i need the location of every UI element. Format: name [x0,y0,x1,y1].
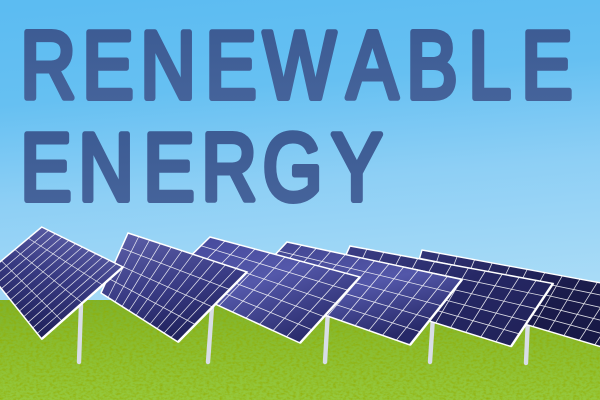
grass field [0,300,600,400]
solar panel 3 [165,237,360,343]
title: RENEWABLE [20,12,573,119]
title [20,12,573,221]
solar panel 5 [330,246,553,346]
solar panel 6 [410,250,600,350]
poles [325,310,528,363]
pole 1 [79,305,81,362]
pole 2 [208,307,212,362]
solar panel 2 [101,233,247,342]
title: ENERGY [20,114,382,221]
solar panel 4 [245,242,462,345]
sky background [0,0,600,320]
solar panel 1 [0,227,123,339]
